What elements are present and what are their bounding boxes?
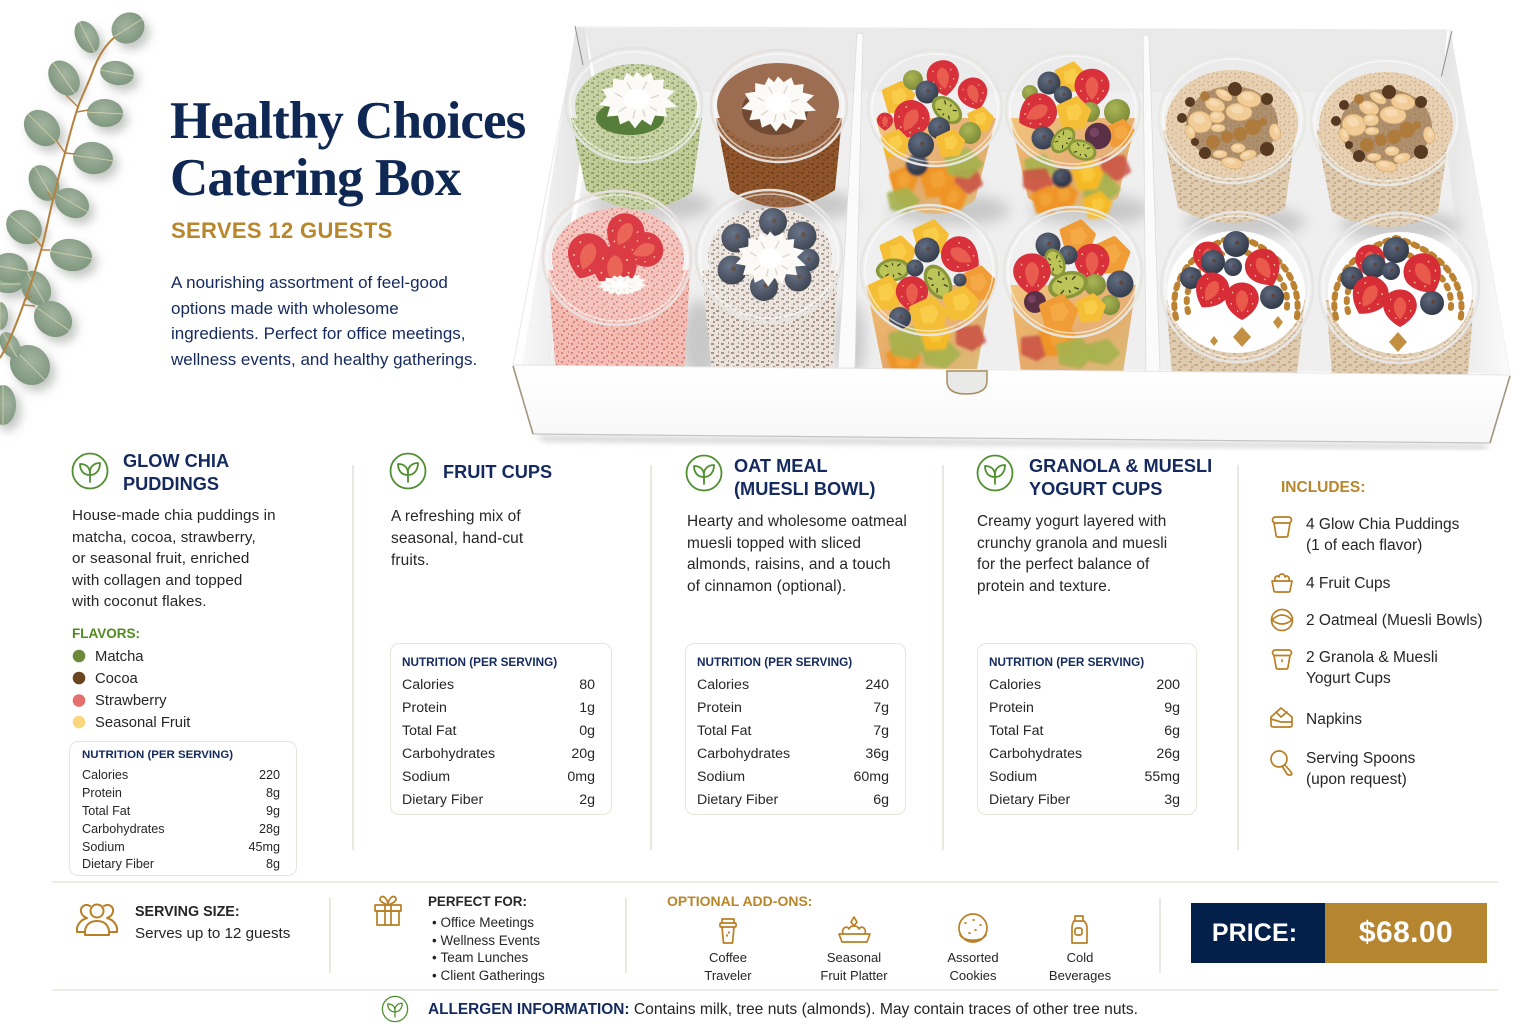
cup: yogurt 2 — [1319, 213, 1479, 375]
nutrition: chia: 8g — [266, 857, 280, 871]
nutrition: fruit: Protein — [402, 700, 447, 716]
cup: fruit 4 — [1004, 207, 1142, 380]
column dividers — [352, 465, 354, 850]
nutrition: granola: 9g — [1164, 700, 1180, 716]
nutrition: oat: Sodium — [697, 769, 745, 785]
nutrition: chia: Dietary Fiber — [82, 857, 154, 871]
icon: coffee traveler — [720, 919, 736, 943]
includes list: Napkins — [1306, 710, 1362, 728]
fruit description: seasonal, hand-cut — [391, 530, 523, 547]
nutrition: granola — [977, 643, 1197, 815]
perfect for list: • Client Gatherings — [432, 968, 545, 982]
granola description — [977, 513, 1167, 595]
icon: fruit cup — [1272, 574, 1292, 592]
nutrition: oat — [685, 643, 906, 815]
add-on: cookies — [947, 950, 999, 982]
add-on: coffee — [704, 950, 752, 982]
nutrition: oat: Dietary Fiber — [697, 792, 778, 808]
perfect for list — [432, 915, 545, 983]
nutrition: granola: Protein — [989, 700, 1034, 716]
cup: cocoa chia — [711, 50, 847, 208]
chia description: House-made chia puddings in — [72, 507, 276, 524]
icon: cold beverage — [1072, 916, 1087, 943]
section: granola: YOGURT CUPS — [1029, 478, 1162, 498]
flavor dots — [73, 650, 85, 728]
icon: gift — [375, 897, 401, 925]
add-on: coffee: Traveler — [704, 968, 752, 982]
title: Catering Box — [170, 148, 460, 206]
section: oat meal: OAT MEAL — [734, 456, 828, 476]
title: Healthy Choices — [170, 92, 525, 150]
add-on: fruit platter: Seasonal — [827, 950, 881, 965]
nutrition: chia: NUTRITION (PER SERVING) — [82, 749, 233, 761]
chia description: with coconut flakes. — [72, 593, 207, 610]
nutrition: chia: 45mg — [248, 840, 280, 854]
title — [170, 92, 525, 206]
cup: strawberry chia — [543, 191, 691, 375]
price value: $68.00 — [1359, 916, 1453, 949]
nutrition: chia: 9g — [266, 804, 280, 818]
nutrition: fruit: 20g — [571, 746, 595, 762]
nutrition: fruit: Sodium — [402, 769, 450, 785]
intro text: wellness events, and healthy gatherings. — [171, 350, 477, 369]
price value — [1325, 903, 1487, 963]
box notch — [947, 371, 987, 394]
section: glow chia puddings: PUDDINGS — [123, 474, 219, 494]
nutrition: oat: 240 — [865, 677, 889, 693]
includes list: (upon request) — [1306, 771, 1407, 788]
chia description: or seasonal fruit, enriched — [72, 550, 249, 567]
flavors list: Matcha — [95, 649, 144, 665]
includes list: (1 of each flavor) — [1306, 537, 1422, 554]
add-on: cookies: Cookies — [950, 968, 996, 982]
cup: fruit 3 — [861, 205, 997, 380]
nutrition: granola: NUTRITION (PER SERVING) — [989, 656, 1144, 669]
add-ons heading: OPTIONAL ADD-ONS: — [667, 893, 812, 909]
price label — [1191, 903, 1325, 963]
add-on: coffee: Coffee — [709, 950, 747, 965]
nutrition: chia: Carbohydrates — [82, 822, 165, 836]
nutrition: chia: 28g — [259, 822, 280, 836]
nutrition: granola: Calories — [989, 677, 1041, 693]
perfect for list: • Team Lunches — [432, 950, 528, 965]
includes list: 4 Glow Chia Puddings — [1306, 516, 1459, 532]
granola description: Creamy yogurt layered with — [977, 513, 1166, 530]
nutrition: fruit: 80 — [579, 677, 595, 693]
serving size: SERVING SIZE: — [135, 904, 240, 920]
divider 1 — [838, 33, 863, 368]
perfect for: PERFECT FOR: — [428, 894, 527, 908]
nutrition: fruit: NUTRITION (PER SERVING) — [402, 656, 557, 669]
nutrition: oat: Total Fat — [697, 723, 751, 739]
cup: matcha chia — [566, 48, 702, 210]
nutrition: granola: 3g — [1164, 792, 1180, 808]
nutrition: oat: 7g — [873, 700, 889, 716]
oat description: of cinnamon (optional). — [687, 578, 846, 595]
oat description — [687, 513, 907, 595]
granola description: crunchy granola and muesli — [977, 535, 1167, 552]
nutrition: chia: Calories — [82, 768, 128, 782]
icon: cookie — [959, 914, 987, 942]
nutrition: granola: Carbohydrates — [989, 746, 1082, 762]
intro text: A nourishing assortment of feel-good — [171, 273, 448, 292]
includes heading: INCLUDES: — [1281, 479, 1365, 496]
intro text: options made with wholesome — [171, 299, 399, 318]
nutrition: fruit: Carbohydrates — [402, 746, 495, 762]
box interior — [513, 26, 1510, 375]
flavors list — [95, 649, 190, 731]
add-on: fruit platter: Fruit Platter — [820, 968, 888, 982]
icon: people — [77, 904, 117, 935]
chia description: matcha, cocoa, strawberry, — [72, 529, 256, 546]
oat description: muesli topped with sliced — [687, 535, 861, 552]
nutrition: fruit: Total Fat — [402, 723, 456, 739]
icon: fruit platter — [839, 917, 870, 942]
divider 2 — [1143, 35, 1160, 372]
icon: leaf chia — [72, 454, 108, 488]
nutrition: oat: Protein — [697, 700, 742, 716]
icon: napkins — [1271, 708, 1292, 727]
perfect for list: • Wellness Events — [432, 932, 540, 948]
includes list: 4 Fruit Cups — [1306, 574, 1390, 592]
flavors heading: FLAVORS: — [72, 626, 140, 641]
flavors list: Seasonal Fruit — [95, 715, 190, 731]
nutrition: chia: Protein — [82, 786, 122, 800]
section: glow chia puddings: GLOW CHIA — [123, 451, 229, 471]
nutrition: chia: Sodium — [82, 840, 125, 854]
nutrition: oat: 60mg — [854, 769, 889, 785]
icon: granola cup — [1272, 650, 1292, 669]
cup: fruit 2 — [1006, 52, 1140, 217]
box shadow — [535, 436, 1490, 449]
cup: yogurt 1 — [1161, 212, 1313, 375]
granola description: for the perfect balance of — [977, 556, 1149, 573]
nutrition: fruit: 0g — [579, 723, 595, 739]
includes list: Serving Spoons — [1306, 750, 1415, 766]
includes list: 2 Oatmeal (Muesli Bowls) — [1306, 612, 1483, 628]
nutrition: granola: 200 — [1156, 677, 1180, 693]
oat description: Hearty and wholesome oatmeal — [687, 513, 907, 530]
nutrition: oat: Carbohydrates — [697, 746, 790, 762]
section: fruit cups: FRUIT CUPS — [443, 462, 552, 482]
add-on: beverages: Beverages — [1049, 968, 1111, 982]
section: glow chia puddings — [123, 451, 229, 494]
add-on: beverages: Cold — [1067, 950, 1093, 965]
section: oat meal: (MUESLI BOWL) — [734, 478, 875, 498]
add-on: beverages — [1049, 950, 1111, 982]
nutrition: chia: 8g — [266, 786, 280, 800]
nutrition: fruit: 0mg — [567, 769, 595, 785]
flavors list: Cocoa — [95, 671, 138, 687]
box front wall — [513, 365, 1510, 443]
fruit description: A refreshing mix of — [391, 508, 521, 525]
nutrition: oat: 6g — [873, 792, 889, 808]
fruit description: fruits. — [391, 552, 429, 569]
add-on: cookies: Assorted — [947, 950, 999, 965]
cup: oatmeal 1 — [1159, 55, 1305, 223]
section: oat meal — [734, 456, 875, 499]
nutrition: oat: NUTRITION (PER SERVING) — [697, 656, 852, 669]
nutrition: fruit: Calories — [402, 677, 454, 693]
granola description: protein and texture. — [977, 578, 1111, 595]
nutrition: oat: 7g — [873, 723, 889, 739]
nutrition: granola: Total Fat — [989, 723, 1043, 739]
includes list: Yogurt Cups — [1306, 670, 1391, 687]
section: granola: GRANOLA & MUESLI — [1029, 456, 1212, 476]
nutrition: fruit: Dietary Fiber — [402, 792, 483, 808]
fruit description — [391, 508, 524, 569]
nutrition: fruit — [390, 643, 612, 815]
icon: leaf fruit — [390, 454, 426, 488]
allergen information: ALLERGEN INFORMATION: Contains milk, tree nuts (almonds). May contain traces of other tree nuts. — [428, 1001, 1138, 1018]
nutrition: oat: Calories — [697, 677, 749, 693]
intro text — [171, 273, 477, 369]
price label: PRICE: — [1212, 919, 1297, 947]
nutrition: granola: Dietary Fiber — [989, 792, 1070, 808]
includes list: 2 Granola & Muesli — [1306, 648, 1438, 666]
serving size: Serves up to 12 guests — [135, 925, 290, 942]
nutrition: chia: 220 — [259, 768, 280, 782]
nutrition: granola: 26g — [1156, 746, 1180, 762]
nutrition: granola: 6g — [1164, 723, 1180, 739]
cup: oatmeal 2 — [1311, 57, 1461, 227]
subtitle: SERVES 12 GUESTS — [171, 218, 393, 243]
nutrition: fruit: 2g — [579, 792, 595, 808]
icon: serving spoon — [1271, 751, 1292, 775]
section: granola — [1029, 456, 1212, 498]
nutrition: chia: Total Fat — [82, 804, 130, 818]
cup shadows — [588, 189, 1460, 380]
nutrition: granola: Sodium — [989, 769, 1037, 785]
intro text: ingredients. Perfect for office meetings, — [171, 324, 466, 343]
chia description — [72, 507, 276, 610]
icon: oat bowl — [1272, 610, 1292, 630]
icon: leaf oatmeal — [686, 456, 722, 490]
icon: chia cup — [1272, 517, 1292, 537]
nutrition: fruit: 1g — [579, 700, 595, 716]
perfect for list: • Office Meetings — [432, 915, 534, 930]
cup: blueberry chia — [696, 190, 842, 375]
nutrition: oat: 36g — [865, 746, 889, 762]
price badge — [1191, 903, 1487, 963]
cup: fruit 1 — [868, 50, 1002, 214]
icon: leaf allergen — [382, 996, 408, 1022]
add-on: fruit platter — [820, 950, 888, 982]
includes list — [1306, 516, 1483, 788]
oat description: almonds, raisins, and a touch — [687, 556, 891, 573]
icon: leaf granola — [978, 456, 1012, 490]
nutrition: chia — [69, 741, 297, 876]
serving size — [135, 904, 290, 942]
nutrition: granola: 55mg — [1144, 769, 1180, 785]
flavors list: Strawberry — [95, 693, 167, 709]
chia description: with collagen and topped — [72, 572, 242, 589]
